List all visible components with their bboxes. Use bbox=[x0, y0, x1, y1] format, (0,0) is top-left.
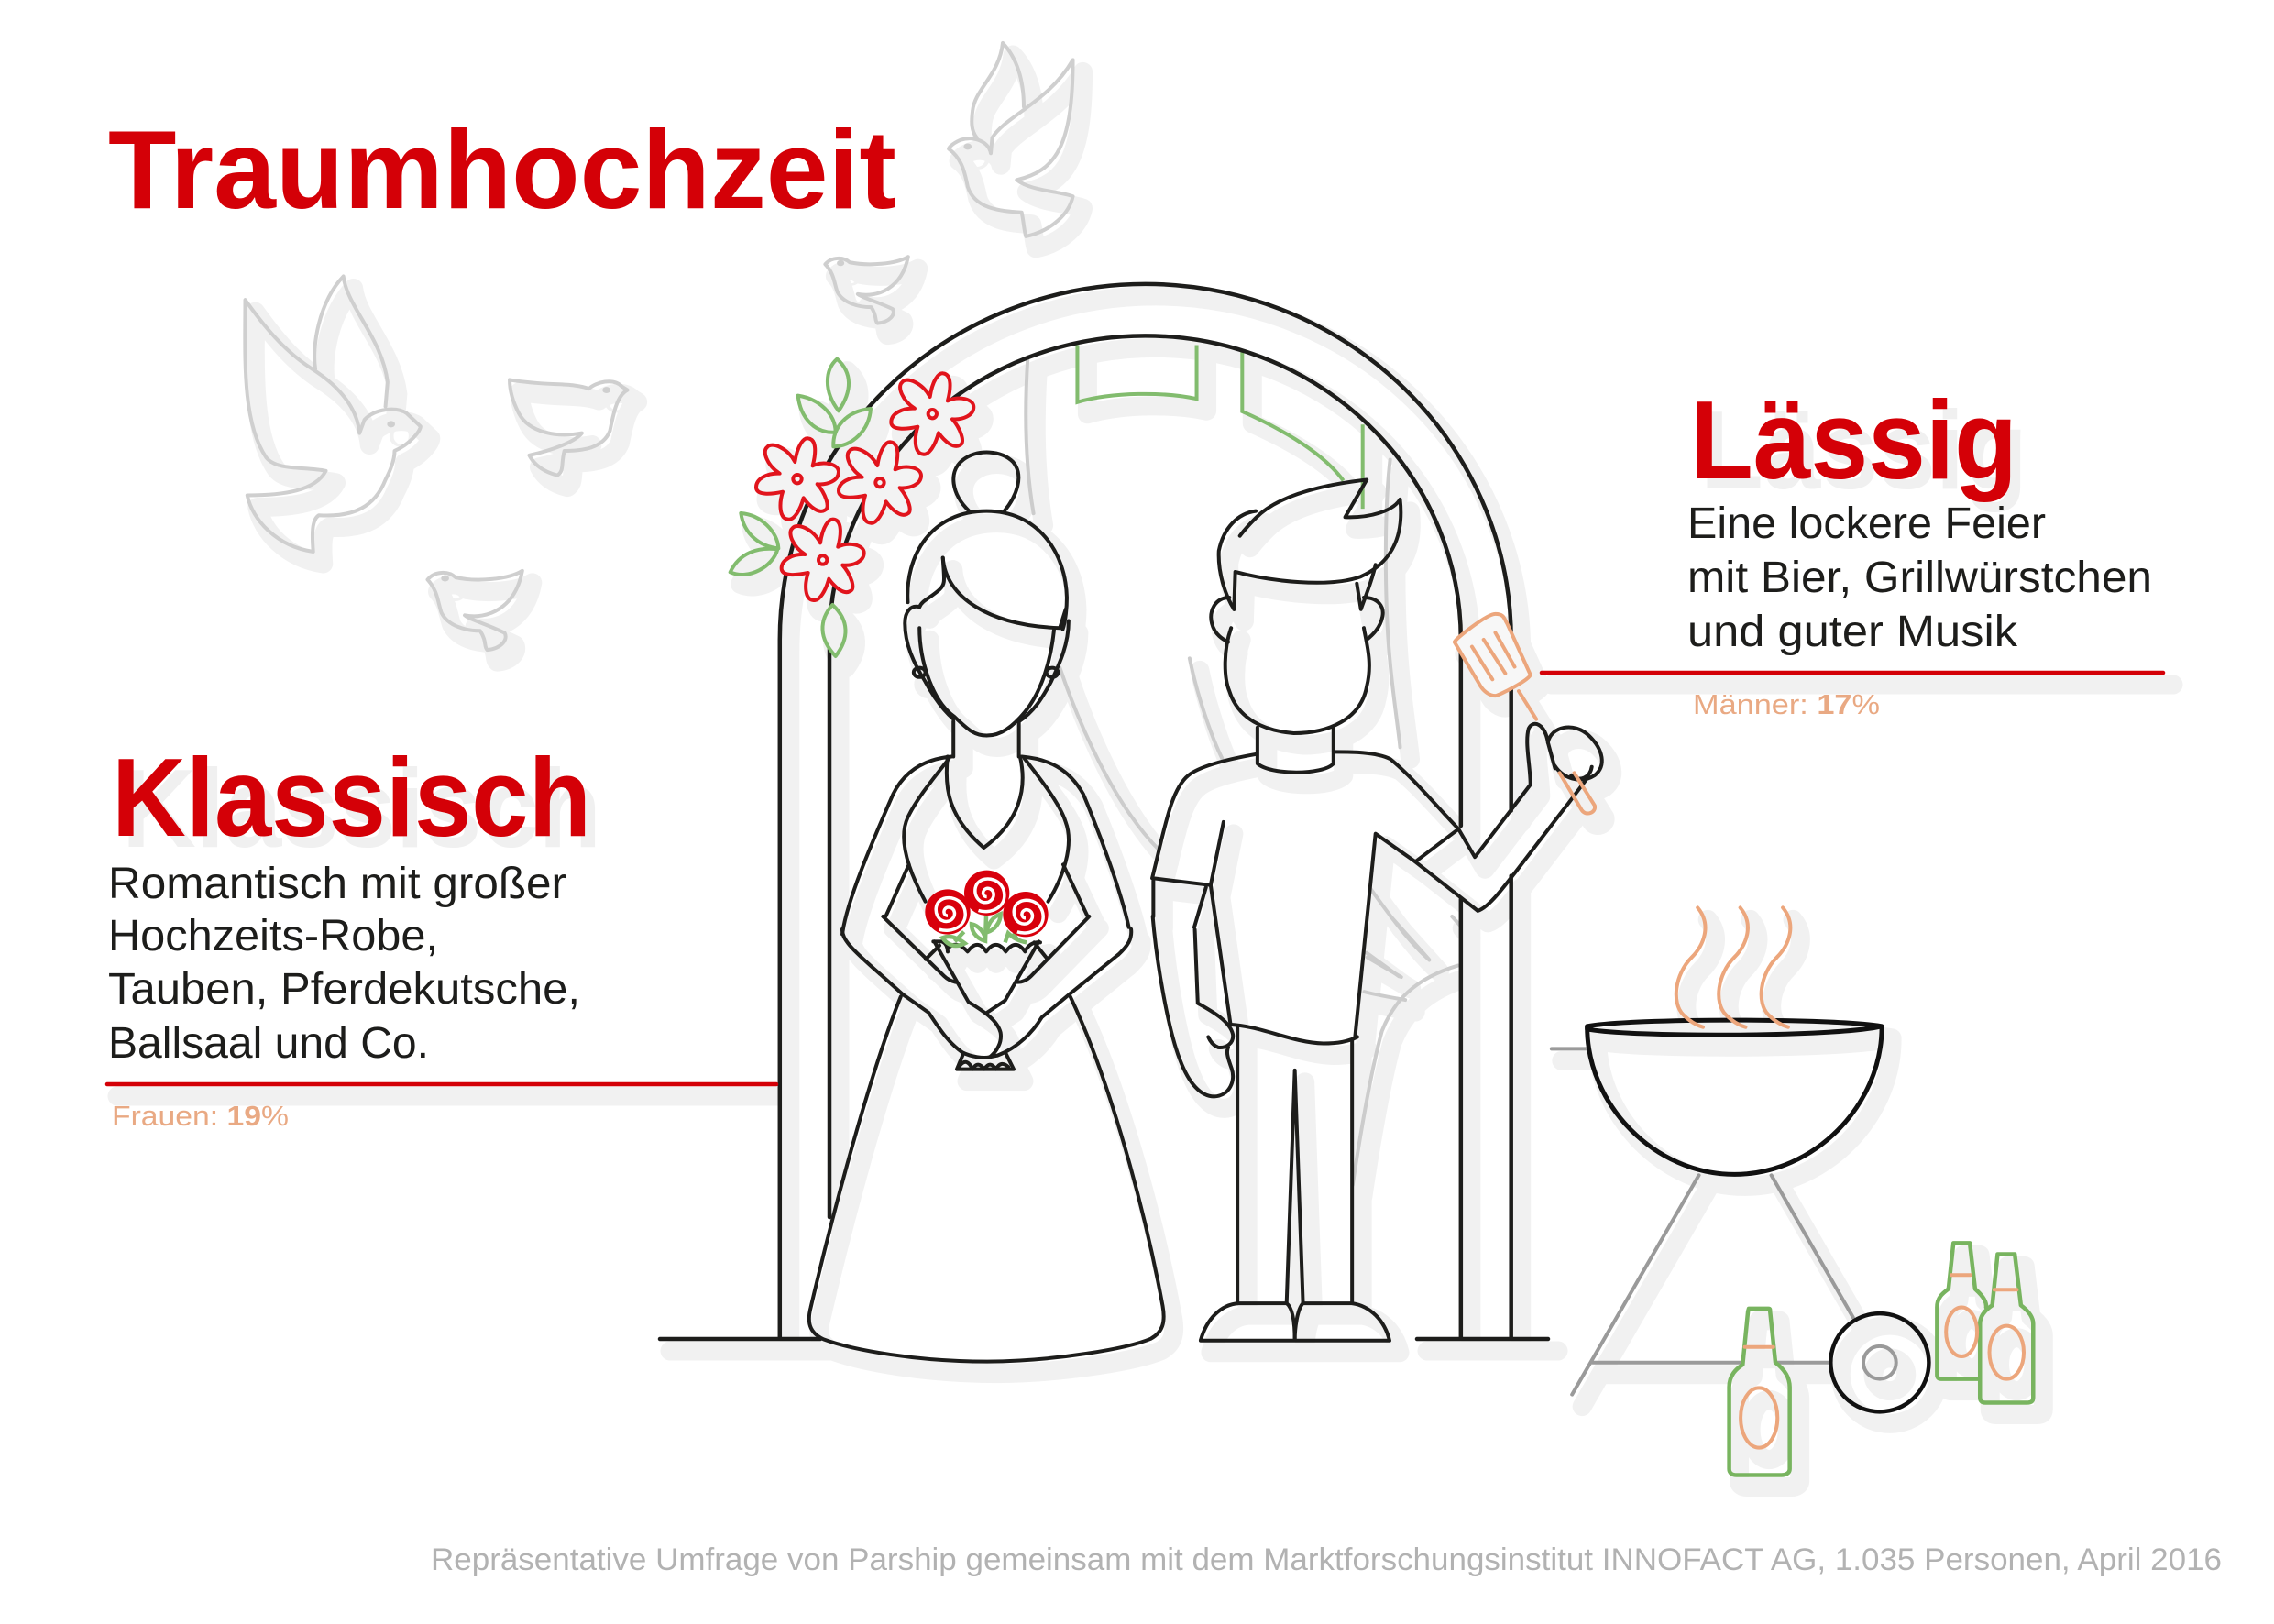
text block: Klassisch description: Tauben, Pferdekutsche, bbox=[108, 965, 580, 1014]
bottle labels bbox=[1741, 1275, 2024, 1448]
doves bbox=[245, 43, 1073, 650]
footer source note: Repräsentative Umfrage von Parship gemeinsam mit dem Marktforschungsinstitut INNOFACT AG, 1.035 Personen, April 2016 bbox=[431, 1542, 2222, 1577]
bouquet roses bbox=[925, 871, 1049, 937]
heading: Lässig: Lässig bbox=[1690, 378, 2017, 502]
text block: Klassisch description: Ballsaal und Co. bbox=[108, 1019, 429, 1068]
grill bbox=[1552, 907, 1928, 1411]
icon: small dove upper bbox=[825, 257, 908, 324]
arch bbox=[660, 284, 1548, 1339]
bottle outlines bbox=[1730, 1243, 2033, 1476]
text block: Klassisch description: Hochzeits-Robe, bbox=[108, 912, 438, 960]
bride skirt bbox=[809, 929, 1164, 1362]
bouquet bbox=[925, 871, 1049, 946]
leaves on arch bbox=[731, 359, 871, 656]
text block: Lässig description: und guter Musik bbox=[1687, 608, 2018, 656]
groom head and shirt bbox=[1152, 479, 1602, 1037]
text block: Lässig description bbox=[1687, 499, 2152, 656]
bride head and upper dress bbox=[842, 453, 1129, 934]
shadow layer bbox=[117, 55, 2173, 1487]
icon: spatula bbox=[1455, 614, 1595, 814]
divider: Klassisch rule bbox=[107, 1082, 776, 1086]
stat: Männer 17%: Männer: 17% bbox=[1693, 688, 1880, 720]
grill bowl bbox=[1587, 1020, 1882, 1174]
icon: small dove centre bbox=[510, 379, 628, 476]
grill legs bbox=[1552, 1048, 1896, 1395]
groom bbox=[1152, 479, 1602, 1341]
title: Traumhochzeit bbox=[108, 107, 896, 232]
steam bbox=[1676, 907, 1790, 1027]
bouquet leaves bbox=[942, 914, 1027, 946]
divider: Lässig rule bbox=[1542, 671, 2163, 675]
heading: Lässig shadow: Lässig bbox=[1700, 388, 2027, 512]
flowers on arch bbox=[756, 373, 973, 600]
carriage window outlines bbox=[1077, 346, 1363, 509]
stat: Frauen 19%: Frauen: 19% bbox=[112, 1100, 289, 1132]
text block: Klassisch description bbox=[108, 860, 580, 1068]
background carriage lines bbox=[1026, 359, 1461, 1185]
icon: small dove lower bbox=[427, 571, 522, 650]
panel: Lässig bbox=[1542, 378, 2163, 720]
bride bbox=[809, 453, 1164, 1362]
text block: Lässig description: mit Bier, Grillwürstchen bbox=[1687, 554, 2152, 602]
text block: Lässig description: Eine lockere Feier bbox=[1687, 499, 2046, 548]
beer bottles bbox=[1730, 1243, 2033, 1476]
heading: Klassisch shadow: Klassisch bbox=[122, 746, 601, 871]
panel: Klassisch bbox=[107, 735, 776, 1132]
icon: large dove left bbox=[245, 276, 421, 552]
icon: large dove top right bbox=[949, 43, 1073, 236]
grill wheel bbox=[1830, 1313, 1928, 1411]
groom legs and shoes bbox=[1153, 916, 1390, 1341]
bride arms and bouquet wrapper bbox=[880, 864, 1118, 1070]
heading: Klassisch: Klassisch bbox=[112, 735, 591, 860]
text block: Klassisch description: Romantisch mit großer bbox=[108, 860, 566, 908]
